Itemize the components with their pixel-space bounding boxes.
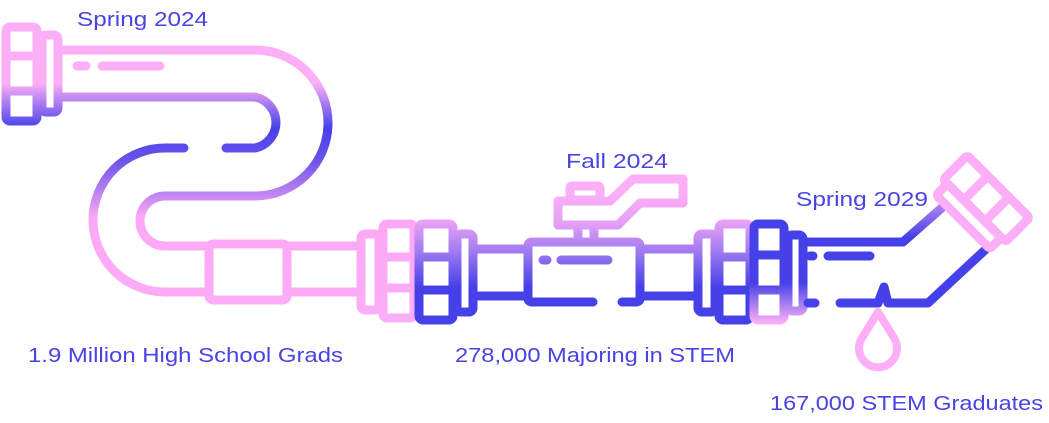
pipe: S-bend left section bbox=[6, 27, 414, 318]
label: 278,000 Majoring in STEM: 278,000 Majoring in STEM bbox=[455, 345, 735, 367]
valve handle bbox=[578, 228, 594, 240]
title: Spring 2024: Spring 2024 bbox=[77, 9, 208, 31]
label: 167,000 STEM Graduates: 167,000 STEM Graduates bbox=[770, 393, 1043, 415]
icon: water drop bbox=[859, 312, 897, 367]
label: Fall 2024: Fall 2024 bbox=[566, 151, 668, 173]
pipe: outlet with blue cap bbox=[754, 224, 803, 320]
label: Spring 2029: Spring 2029 bbox=[796, 189, 928, 211]
pipe: angled outlet with leak bbox=[805, 155, 1030, 303]
pipe: valve section bbox=[419, 179, 750, 320]
label: 1.9 Million High School Grads: 1.9 Million High School Grads bbox=[28, 345, 343, 367]
valve body bbox=[528, 242, 640, 302]
